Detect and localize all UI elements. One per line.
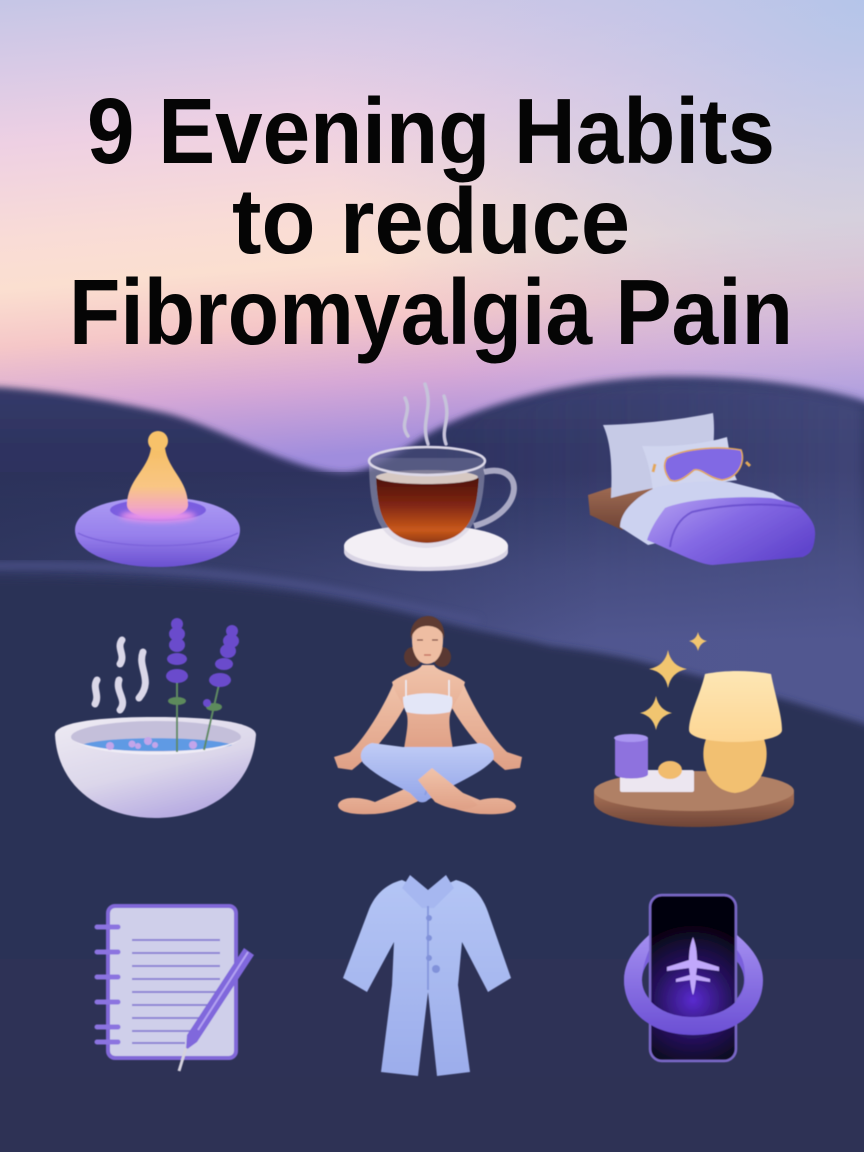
title <box>69 79 793 364</box>
icon: pyjama onesie <box>343 875 511 1076</box>
icon: candle flame on purple ring <box>75 431 240 567</box>
icon: bedside lamp on shelf <box>594 632 794 827</box>
title: 9 Evening Habits <box>87 79 775 183</box>
title: to reduce <box>232 169 630 273</box>
background: twilight sky <box>0 0 864 500</box>
icon: meditating woman <box>334 616 522 814</box>
title: Fibromyalgia Pain <box>69 260 793 364</box>
icon: phone in airplane mode with purple ring <box>624 895 763 1061</box>
icon: cup of tea on saucer <box>344 384 514 571</box>
background: layered hills <box>0 377 864 1152</box>
icon: spiral notebook and pen <box>97 906 254 1071</box>
icon: lavender foot bath bowl <box>55 618 256 818</box>
icon: bed with pillows and sleep mask <box>588 413 815 565</box>
